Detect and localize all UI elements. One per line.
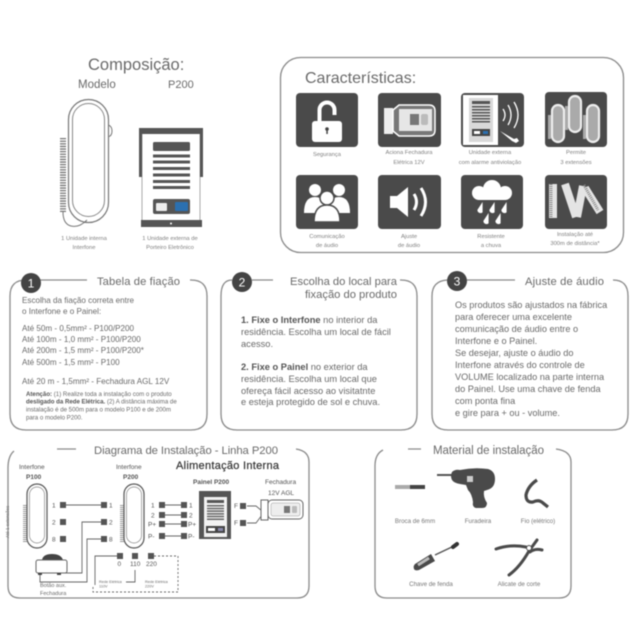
heading: material: Material de instalação xyxy=(433,445,544,457)
text: ajuste de áudio: comunicação de áudio entre o xyxy=(455,324,578,334)
text: wiring table: Até 500m - 1,5 mm² - P100 xyxy=(22,358,120,367)
device: interfone P100: P100 xyxy=(26,474,42,481)
icon: chuva xyxy=(461,175,523,229)
text: atenção: para o modelo P200. xyxy=(26,414,83,422)
icon: broca xyxy=(395,485,425,489)
label: rede elétrica: Rede Elétrica xyxy=(99,580,123,584)
heading: alimentação: Alimentação Interna xyxy=(176,460,280,472)
text: fixação: ofereça fácil acesso ao visitatnte xyxy=(241,386,375,396)
text: wiring table: Escolha da fiação correta entre xyxy=(22,296,135,305)
heading: ajuste: Ajuste de áudio xyxy=(525,276,604,288)
text: ajuste de áudio: Os produtos são ajustados na fábrica xyxy=(455,300,608,310)
text: fixação: acesso. xyxy=(241,339,273,349)
label: rede elétrica: 110V xyxy=(99,584,108,588)
text: atenção: Atenção: xyxy=(26,391,52,398)
heading: diagrama: Diagrama de Instalação - Linha P200 xyxy=(94,445,278,457)
heading: características: Características: xyxy=(305,70,416,87)
text: fixação: 2. Fixe o Painel xyxy=(241,362,308,372)
text: ajuste de áudio: e gire para + ou - volume. xyxy=(455,408,560,418)
caption: comunicação: de áudio xyxy=(316,243,338,249)
wiring: terminals xyxy=(60,502,246,559)
badge: 1 xyxy=(21,273,41,293)
caption: fechadura: Aciona Fechadura xyxy=(385,150,433,156)
icon: alarme antiviolação xyxy=(461,93,524,147)
text: wiring table: Até 100m - 1,0 mm² - P100/P200 xyxy=(22,335,141,344)
device: fechadura: Fechadura xyxy=(265,479,296,486)
panel: tabela de fiação xyxy=(10,273,207,430)
caption: painel: 1 Unidade externa de xyxy=(142,236,198,242)
caption: interfone: 1 Unidade interna xyxy=(61,236,108,242)
caption: alicate: Alicate de corte xyxy=(498,581,541,588)
icon: 3 extensões xyxy=(545,92,607,147)
side label: Até 1 extensões xyxy=(5,505,10,538)
caption: comunicação: Comunicação xyxy=(309,234,345,240)
panel: diagrama de instalação xyxy=(5,445,309,598)
wiring: terminal labels: P- xyxy=(188,534,194,540)
heading: tabela: Tabela de fiação xyxy=(97,276,180,288)
wiring: terminal labels: 220 xyxy=(146,561,157,568)
wiring: terminal labels: 8 xyxy=(109,536,113,544)
wiring: terminal labels: 2 xyxy=(109,520,113,526)
text: ajuste de áudio: VOLUME localizado na parte interna xyxy=(455,372,605,382)
caption: distância: Instalação até xyxy=(557,232,593,238)
wiring: terminal labels xyxy=(52,502,238,568)
wiring: terminal labels: 1 xyxy=(109,502,113,510)
caption: furadeira: Furadeira xyxy=(465,518,492,525)
text: wiring table: Até 20 m - 1,5mm² - Fechadura AGL 12V xyxy=(22,377,170,386)
panel: material de instalação xyxy=(375,445,571,598)
badge: 2: 2 xyxy=(239,276,246,290)
caption: interfone: Interfone xyxy=(73,245,95,251)
badge: 3: 3 xyxy=(454,274,461,288)
caption: fio: Fio (elétrico) xyxy=(521,518,555,525)
text: ajuste de áudio: do Painel. Use uma chave de fenda xyxy=(455,384,601,394)
text: ajuste de áudio: para oferecer uma excelente xyxy=(455,312,572,322)
text: ajuste de áudio: Se desejar, ajuste o áudio do xyxy=(455,348,574,358)
section: composição xyxy=(61,56,203,251)
label: rede elétrica: Rede Elétrica xyxy=(145,580,169,584)
text: fixação: no exterior da xyxy=(308,362,368,372)
icon: chave de fenda xyxy=(414,544,457,570)
label: P200: P200 xyxy=(168,79,194,91)
caption: fechadura: Elétrica 12V xyxy=(393,160,425,166)
icon: fechadura xyxy=(378,93,441,147)
text: wiring table: Até 200m - 1,5 mm² - P100/P200* xyxy=(22,346,145,355)
caption: ajuste: Ajuste xyxy=(401,234,417,240)
device: interfone P200 xyxy=(116,464,144,548)
text: ajuste de áudio: Interfone através do controle de xyxy=(455,360,585,370)
panel: ajuste de áudio xyxy=(432,271,628,430)
caption: segurança: Segurança xyxy=(313,152,342,158)
text: ajuste de áudio: com ponta fina xyxy=(455,396,516,406)
badge: 2 xyxy=(232,272,252,292)
illustration: interfone handset xyxy=(63,100,112,226)
icon: comunicação xyxy=(296,175,358,229)
badge: 1: 1 xyxy=(28,276,35,290)
device: interfone P100: Interfone xyxy=(19,464,45,471)
text: fixação: no interior da xyxy=(321,315,378,325)
caption: chave de fenda: Chave de fenda xyxy=(409,581,453,588)
wiring: terminal labels: 0 xyxy=(118,561,122,568)
caption: chuva: a chuva xyxy=(481,243,502,249)
label: modelo: Modelo xyxy=(78,79,116,91)
heading: escolha do local: fixação do produto xyxy=(305,289,397,301)
icon: volume xyxy=(378,175,441,229)
wiring: terminal labels: 110 xyxy=(130,561,141,568)
wiring: terminal labels: 2 xyxy=(52,520,56,526)
text: fixação: residência. Escolha um local de fácil xyxy=(241,327,391,337)
text: fixação: e esteja protegido de sol e chuva. xyxy=(241,397,380,407)
text: ajuste de áudio: Interfone e o Painel. xyxy=(455,336,537,346)
device: fechadura: 12V AGL xyxy=(268,490,294,497)
wiring: terminal labels: F xyxy=(234,503,238,510)
icon: segurança xyxy=(296,93,358,147)
wiring: terminal labels: 8 xyxy=(52,536,56,544)
icon: furadeira xyxy=(437,468,495,508)
text: wiring table: Até 50m - 0,5mm² - P100/P200 xyxy=(22,324,135,333)
caption: painel: Porteiro Eletrônico xyxy=(146,245,194,251)
heading: escolha do local: Escolha do local para xyxy=(290,276,398,288)
wiring: terminal labels: 2 xyxy=(151,512,155,520)
caption: extensões: 3 extensões xyxy=(560,160,592,166)
panel: características xyxy=(280,58,624,252)
device: interfone P100 xyxy=(19,464,47,548)
caption: distância: 300m de distância* xyxy=(550,241,600,247)
icon: distância xyxy=(545,175,607,229)
device: botão auxiliar: Botão aux. xyxy=(40,583,67,589)
text: fixação: 1. Fixe o Interfone xyxy=(241,315,321,325)
wiring: terminal labels: 2 xyxy=(189,512,193,520)
wiring: terminal labels: 1 xyxy=(151,502,155,510)
panel: escolha do local xyxy=(221,272,417,430)
text: atenção: (2) A distância máxima de xyxy=(105,398,177,406)
device: fechadura xyxy=(261,479,303,520)
wiring: lines xyxy=(40,505,262,592)
icon: alicate xyxy=(496,540,542,575)
wiring: terminal labels: P+ xyxy=(148,522,156,528)
wiring: terminal labels: F xyxy=(234,520,238,527)
caption: ajuste: de áudio xyxy=(398,243,420,249)
caption: alarme: Unidade externa xyxy=(469,150,512,156)
badge: 3 xyxy=(447,271,467,291)
wiring: terminal labels: 1 xyxy=(189,502,193,510)
title: composição: Composição: xyxy=(88,56,184,74)
text: atenção: instalação é de 500m para o modelo P100 e de 200m xyxy=(26,406,171,414)
caption: chuva: Resistente xyxy=(477,234,505,240)
text: fixação: residência. Escolha um local que xyxy=(241,374,377,384)
device: interfone P200: P200 xyxy=(123,474,139,481)
text: atenção: desligado da Rede Elétrica. xyxy=(26,398,106,406)
illustration: external panel xyxy=(139,128,203,227)
icon: fio xyxy=(526,480,548,507)
label: rede elétrica: 220V xyxy=(145,584,154,588)
device: interfone P200: Interfone xyxy=(116,464,142,471)
wiring: terminal labels: P+ xyxy=(188,522,196,528)
device: botão auxiliar: Fechadura xyxy=(40,591,67,597)
wiring: terminal labels: P- xyxy=(148,534,154,540)
device: painel P200 xyxy=(193,479,231,539)
text: wiring table: o Interfone e o Painel: xyxy=(22,307,101,316)
caption: extensões: Permite xyxy=(566,150,586,156)
text: atenção: (1) Realize toda a instalação com o produto xyxy=(52,391,172,398)
wiring: terminal labels: 1 xyxy=(52,502,56,510)
device: botão auxiliar xyxy=(36,554,67,597)
caption: alarme: com alarme antiviolação xyxy=(459,160,521,166)
caption: broca: Broca de 6mm xyxy=(395,518,435,525)
device: painel P200: Painel P200 xyxy=(193,479,230,486)
